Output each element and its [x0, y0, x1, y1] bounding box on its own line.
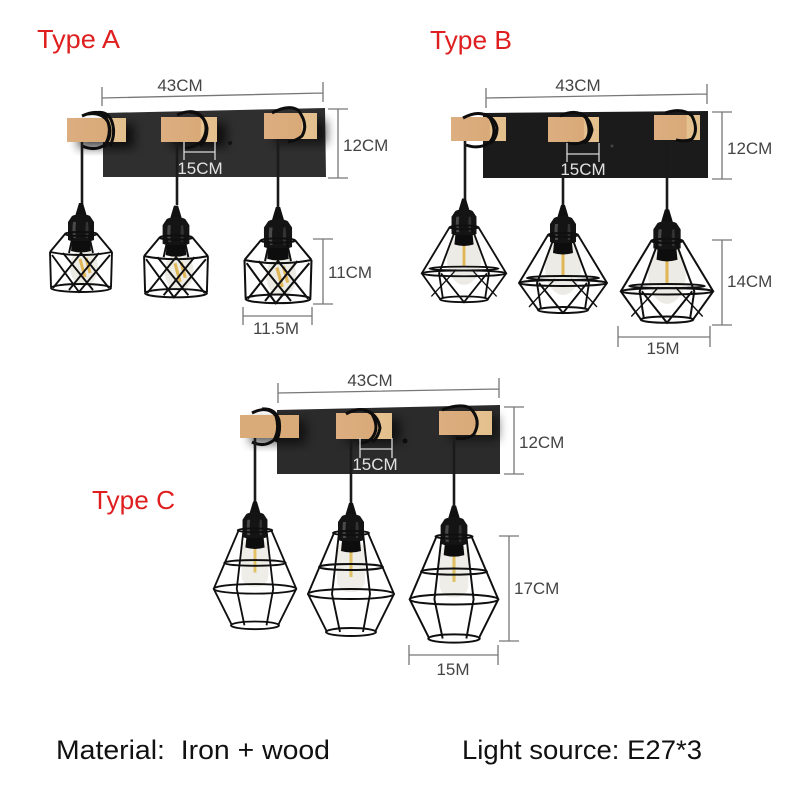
- cords B: [465, 140, 667, 212]
- dimension: spacing 15CM: 15CM: [352, 455, 398, 474]
- cords C: [255, 435, 454, 511]
- dimension: spacing 15CM: 15CM: [177, 159, 223, 178]
- panel: Type B lamp: [422, 76, 772, 358]
- dimension: shade height 17CM: 17CM: [514, 579, 559, 598]
- dimension: height 12CM: [328, 109, 388, 178]
- backplate A: [103, 108, 326, 177]
- panel: Type A lamp: [50, 76, 388, 338]
- shade B2: [519, 205, 607, 313]
- dimension: shade width 15M: 15M: [646, 339, 680, 358]
- dimension: height 12CM: 12CM: [343, 136, 388, 155]
- shade A1: [50, 203, 112, 292]
- shade B1: [422, 198, 506, 302]
- dimension: spacing 15CM: [177, 142, 223, 178]
- dimension: height 12CM: 12CM: [727, 139, 772, 158]
- dimension: width 43CM: [102, 76, 323, 106]
- dimension: shade height 14CM: 14CM: [727, 272, 772, 291]
- shade A2: [144, 206, 208, 297]
- dimension: height 12CM: [712, 112, 772, 179]
- shade C3: [410, 506, 498, 643]
- dimension: shade height 11CM: 11CM: [328, 263, 372, 282]
- text: light source: Light source: E27*3: [462, 735, 702, 765]
- dimension: shade width 15M: [618, 326, 710, 358]
- shade C2: [308, 503, 394, 636]
- panel: Type C lamp: [214, 371, 564, 679]
- dimension: width 43CM: 43CM: [555, 76, 601, 95]
- dimension: shade height 17CM: [499, 536, 559, 641]
- dimension: shade width 11.5M: 11.5M: [253, 319, 299, 338]
- title: Type B: Type B: [430, 25, 512, 55]
- dimension: width 43CM: 43CM: [157, 76, 203, 95]
- dimension: shade width 15M: [409, 645, 498, 679]
- dimension: spacing 15CM: [560, 143, 606, 179]
- dimension: shade width 11.5M: [243, 307, 312, 338]
- title: Type C: Type C: [92, 485, 175, 515]
- shade A3: [245, 207, 311, 303]
- dimension: width 43CM: 43CM: [347, 371, 393, 390]
- dimension: spacing 15CM: [352, 438, 398, 474]
- cords A: [82, 139, 278, 210]
- wood blocks and rings C: [240, 406, 499, 445]
- dimension: width 43CM: [278, 371, 499, 403]
- dimension: spacing 15CM: 15CM: [560, 160, 606, 179]
- dimension: shade height 11CM: [313, 239, 372, 304]
- wood blocks and rings B: [451, 111, 700, 148]
- dimension: height 12CM: 12CM: [519, 433, 564, 452]
- dimension: height 12CM: [504, 407, 564, 474]
- shade C1: [214, 501, 296, 629]
- shade B3: [621, 209, 713, 323]
- title: Type A: Type A: [37, 24, 121, 54]
- dimension: width 43CM: [486, 76, 707, 108]
- dimension: shade width 15M: 15M: [436, 660, 470, 679]
- backplate C: [277, 405, 500, 474]
- wood blocks and rings A: [67, 108, 327, 149]
- dimension: shade height 14CM: [712, 240, 772, 325]
- backplate B: [483, 111, 708, 178]
- text: material: Material: Iron + wood: [56, 735, 330, 765]
